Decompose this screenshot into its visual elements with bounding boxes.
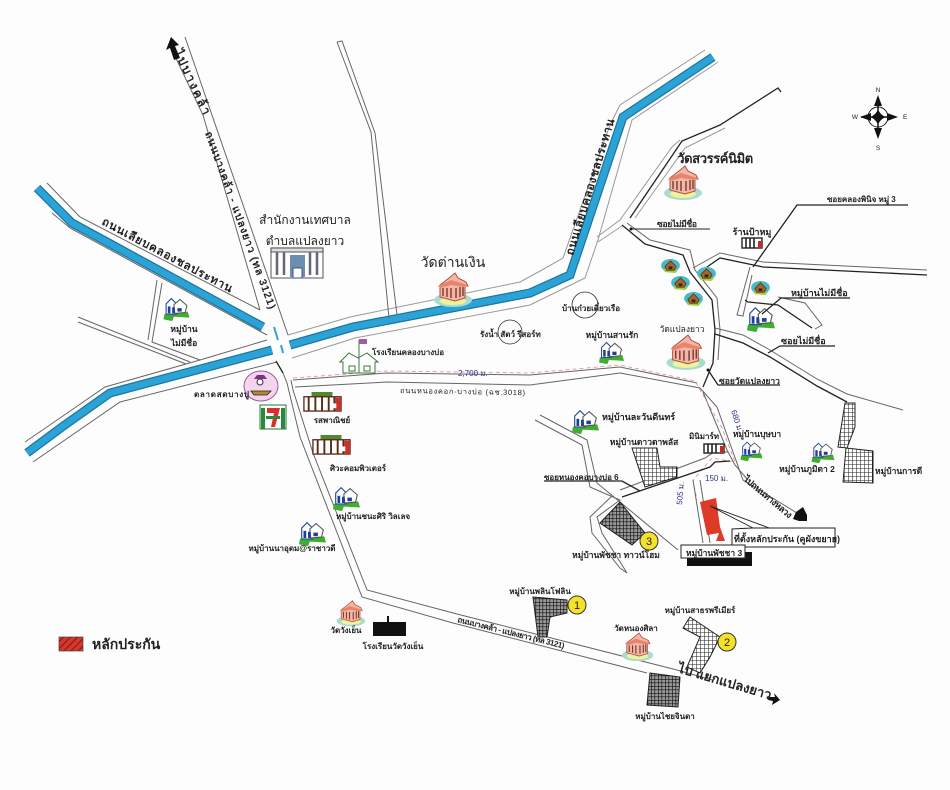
municipal office label: ตำบลแปลงยาว [266, 234, 344, 248]
label: unnamed soi north [630, 217, 710, 230]
village: Butsaba: หมู่บ้านบุษบา [733, 429, 781, 440]
temple: Wat Wang Yen: วัดวังเย็น [331, 624, 362, 635]
label: Soi Nong Khro Bang Bo 6 [544, 473, 640, 491]
icon: fresh market: ตลาดสดบางปู [194, 390, 249, 400]
shop: Ran Pa Mu: ร้านป้าหมู [733, 227, 771, 238]
village block: Phlin [509, 586, 571, 637]
road: Bang Khla to Plaeng Yao south section [276, 361, 712, 680]
legend [59, 636, 161, 652]
road: Wat Sawan road [597, 88, 781, 242]
road: eastern side road [693, 253, 927, 275]
temple: Wat Nong Sila [614, 624, 658, 661]
village block: Phlin: หมู่บ้านพลินโฟลิน [509, 586, 571, 597]
road: Wat Plaeng Yao soi [622, 223, 720, 387]
distance label 680 m: 680 ม. [729, 409, 745, 434]
school: Wat Wang Yen [362, 616, 424, 651]
village: La Wan [572, 411, 675, 434]
distance labels 150 m and 505 m: 505 ม. [675, 481, 686, 505]
callout: Phatcha 3 [681, 545, 752, 566]
road: side lane to the unnamed village [78, 280, 200, 364]
dashed distance line 2,700 m [293, 365, 735, 500]
village: unnamed east [747, 286, 850, 332]
village: unnamed northwest: หมู่บ้าน [170, 324, 198, 335]
village block: Kandee: หมู่บ้านการดี [875, 466, 923, 477]
village: Phumida 2 [779, 443, 835, 475]
callout: collateral location [732, 528, 840, 547]
road: north minor road [337, 41, 397, 318]
canal: southwest arm [27, 350, 272, 453]
road: Nong Khro to Bang Bo road [293, 367, 797, 513]
temple: Wat Wang Yen [331, 601, 365, 635]
municipal office label [259, 213, 351, 248]
legend: หลักประกัน [92, 636, 161, 652]
village: Na Udom [248, 523, 336, 554]
village: Chana Siri [333, 488, 410, 522]
road label: canal road west: ถนนเลียบคลองชลประทาน [100, 215, 235, 295]
label: Soi Khlong Phinit: ซอยคลองพินิจ หมู่ 3 [827, 195, 896, 205]
restaurant: noodle shop circle: บ้านก๋วยเตี๋ยวเรือ [562, 302, 620, 313]
restaurant: noodle shop circle [562, 292, 620, 318]
marker 2 [718, 633, 736, 651]
village block: Sathon Premier: หมู่บ้านสาธรพรีเมียร์ [665, 605, 736, 616]
temple: Wat Plaeng Yao: วัดแปลงยาว [659, 324, 705, 334]
callout: collateral location: ที่ตั้งหลักประกัน (คูผังขยาย) [734, 532, 840, 545]
canal: east arm [290, 57, 713, 345]
village block: Chai Chinda [635, 673, 695, 722]
village block: Dao Da Plus: หมู่บ้านดาวดาพลัส [610, 437, 679, 448]
label: Soi Wat Plaeng Yao: ซอยวัดแปลงยาว [719, 376, 780, 386]
canal: west arm [37, 188, 263, 327]
shop: minimart: มินิมาร์ท [689, 431, 719, 441]
shop: minimart [689, 431, 724, 453]
village: Na Udom: หมู่บ้านนาอุดม@ราชาวดี [248, 543, 336, 554]
road label: Nong Khro road: ถนนหนองคอก-บางบ่อ (ฉช.3018) [400, 386, 526, 397]
village: unnamed east: หมู่บ้านไม่มีชื่อ [791, 286, 848, 299]
distance label 2,700 m: 2,700 ม. [458, 369, 488, 378]
village: Phumida 2: หมู่บ้านภูมิดา 2 [779, 464, 835, 475]
road label: to highway with arrow: ไปถนนทางหลวง [741, 472, 795, 520]
distance labels 150 m and 505 m [675, 474, 728, 505]
village block: Phatcha Townhome: หมู่บ้านพัชชา ทาวน์โฮม [572, 550, 660, 561]
road: Soi Khlong Phinit [737, 205, 908, 316]
marker 1: 1 [574, 600, 580, 612]
label: unnamed soi east: ซอยไม่มีชื่อ [781, 334, 826, 346]
icon: municipal office building [271, 248, 323, 278]
road: unnamed soi with leader [715, 328, 903, 410]
village block: Phatcha Townhome [572, 502, 660, 561]
marker 1 [568, 596, 586, 614]
village block: Kandee [838, 403, 923, 483]
label: Soi Nong Khro Bang Bo 6: ซอยหนองคอบางบ่อ 6 [544, 473, 619, 482]
village: San Rak [586, 330, 638, 364]
road label: canal road east: ถนนเลียบคลองชลประทาน [563, 117, 617, 257]
compass [852, 87, 908, 152]
temple: Wat Tan Ngoen [421, 254, 486, 307]
road: southeast road west branch [535, 415, 730, 573]
resort: Rang Nam: รังน้ำ สัตว์ รีสอร์ท [480, 328, 541, 339]
road: Bang Khla to Plaeng Yao north section [172, 37, 288, 335]
collateral site polygon [700, 498, 772, 541]
road label: south highway: ถนนบางคล้า - แปลงยาว (ทล 3121) [457, 614, 566, 651]
compass: W [852, 114, 859, 121]
school: Khlong Bang Bo [340, 339, 444, 373]
distance labels 150 m and 505 m: 150 ม. [705, 474, 728, 483]
village: San Rak: หมู่บ้านสานรัก [586, 330, 638, 341]
label: unnamed soi north: ซอยไม่มีชื่อ [657, 217, 697, 229]
compass: N [876, 87, 881, 94]
callout: Phatcha 3: หมู่บ้านพัชชา 3 [686, 548, 742, 559]
shop: Siwa Computer [313, 435, 387, 473]
temple: Wat Tan Ngoen: วัดต่านเงิน [421, 254, 486, 270]
village: unnamed northwest [164, 299, 198, 348]
road: southwest canal road edges [25, 340, 277, 462]
municipal office label: สำนักงานเทศบาล [259, 213, 351, 227]
label: unnamed soi east [768, 334, 835, 353]
shop: Siwa Computer: ศิวะคอมพิวเตอร์ [330, 463, 387, 473]
compass: E [903, 114, 908, 121]
road: eastern irrigation canal road edges [288, 50, 718, 358]
village block: Chai Chinda: หมู่บ้านไชยจินดา [635, 711, 695, 722]
village block: Dao Da Plus [610, 437, 679, 487]
icon: arrow to Bang Khla [166, 37, 180, 60]
village: unnamed northwest: ไม่มีชื่อ [170, 336, 197, 348]
road label: to Plaeng Yao junction with arrow: ไป แยกแปลงยาว [674, 659, 774, 702]
resort: Rang Nam [480, 320, 541, 344]
village block: Sathon Premier [665, 605, 736, 673]
icon: 7-Eleven [260, 405, 286, 429]
school: Wat Wang Yen: โรงเรียนวัดวังเย็น [362, 640, 424, 651]
road: western irrigation canal road edges [47, 183, 267, 335]
icon: fresh market [194, 371, 278, 401]
temple: Wat Sawan Nimit [664, 151, 753, 200]
compass: S [876, 145, 881, 152]
school: Khlong Bang Bo: โรงเรียนคลองบางบ่อ [371, 347, 444, 357]
road label: to Bang Khla: ไปบางคล้า [170, 45, 214, 117]
village: Butsaba [733, 429, 781, 461]
village: Chana Siri: หมู่บ้านชนะศิริ วิลเลจ [336, 511, 410, 522]
temple: Wat Plaeng Yao [659, 324, 706, 370]
small houses cluster [661, 259, 770, 306]
shop: Ros Phanich: รสพาณิชย์ [314, 415, 351, 425]
marker 3 [640, 532, 658, 550]
marker 2: 2 [724, 637, 730, 649]
village: La Wan: หมู่บ้านละวันดีนทร์ [602, 411, 675, 423]
shop: Ros Phanich [304, 392, 351, 425]
temple: Wat Nong Sila: วัดหนองศิลา [614, 624, 658, 633]
road label: Bang Khla Plaeng Yao: ถนนบางคล้า - แปลงยาว (ทล 3121) [202, 130, 279, 311]
label: Soi Wat Plaeng Yao [706, 368, 780, 386]
marker 3: 3 [646, 536, 652, 548]
shop: Ran Pa Mu [733, 227, 771, 248]
canal marks at the junction [274, 327, 283, 353]
temple: Wat Sawan Nimit: วัดสวรรค์นิมิต [677, 151, 753, 166]
road: unnamed village soi [745, 297, 822, 329]
